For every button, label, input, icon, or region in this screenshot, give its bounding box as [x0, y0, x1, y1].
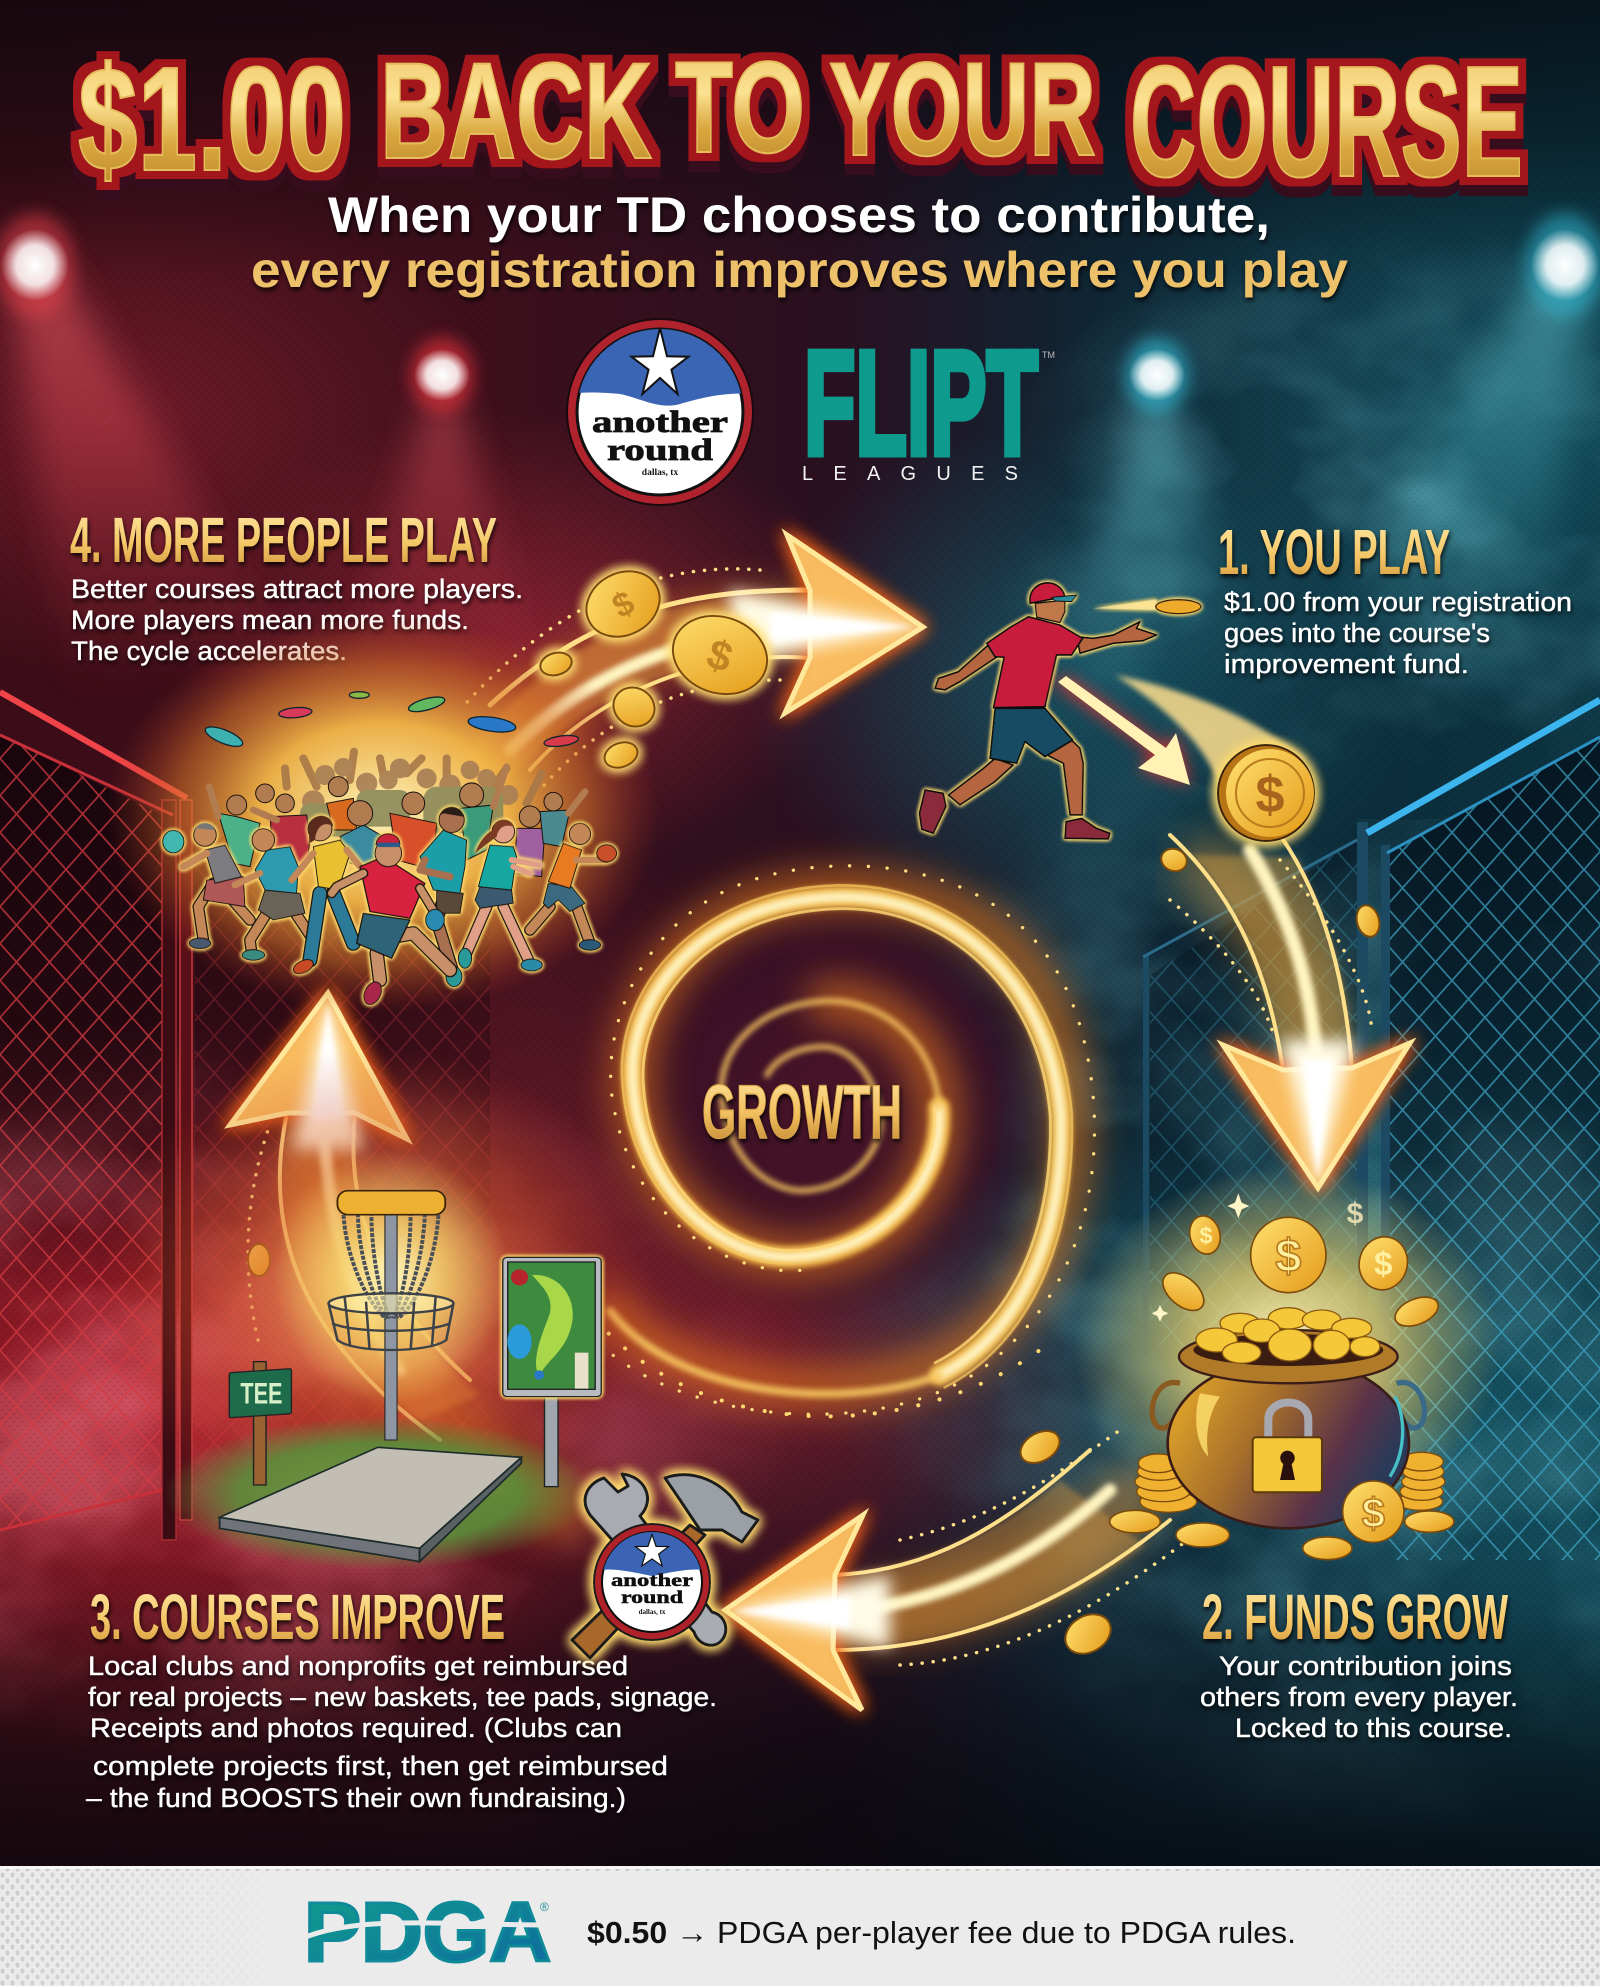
- back shoe: [919, 790, 946, 833]
- coin stacks: [1135, 1452, 1445, 1512]
- wrench: [585, 1474, 726, 1645]
- illustration: pot of gold: $: [1347, 1197, 1364, 1230]
- basket cage: [329, 1293, 453, 1350]
- step 1 text: [1218, 516, 1572, 679]
- logo: flipt leagues: FLIPT: [804, 321, 1038, 486]
- teal shirt runner: [235, 829, 313, 960]
- front arm: [1077, 622, 1157, 653]
- back leg: [948, 758, 1013, 805]
- padlock: [1253, 1402, 1322, 1492]
- logo: pdga: ®: [540, 1900, 549, 1914]
- orange course glow: [100, 1047, 657, 1527]
- growth label: GROWTH: [702, 1070, 902, 1155]
- ground coins: [1110, 1481, 1454, 1560]
- shirt: [987, 617, 1083, 708]
- title: TO: [675, 34, 805, 180]
- front shoe: [1065, 818, 1110, 839]
- step 2 text: Locked to this course.: [1235, 1713, 1512, 1743]
- grass: [164, 1417, 593, 1570]
- main red shirt runner: [332, 834, 450, 1008]
- back row: [285, 752, 542, 837]
- step 3 text: complete projects first, then get reimbursed: [93, 1751, 668, 1781]
- left fence: [0, 692, 490, 1540]
- pot rim and coins: [1179, 1330, 1398, 1383]
- hammer handle: [572, 1525, 705, 1658]
- icon: tools and logo badge: round: [621, 1587, 683, 1607]
- step 3 text: Local clubs and nonprofits get reimbursed: [88, 1651, 628, 1681]
- disc thrower grey: [163, 823, 250, 949]
- logo: another round: dallas, tx: [642, 468, 678, 478]
- illustration: cheering crowd: [107, 613, 660, 1013]
- logo: another round: another: [592, 404, 728, 439]
- step 2 text: Your contribution joins: [1219, 1651, 1512, 1681]
- arrow: you play to funds grow: [1170, 835, 1410, 1188]
- tee sign: [229, 1362, 291, 1485]
- pot body: [1168, 1358, 1409, 1528]
- logo: flipt leagues: LEAGUES: [802, 463, 1018, 485]
- logo: another round: round: [607, 432, 713, 467]
- icon: large coin: $: [1256, 766, 1285, 824]
- title: [78, 34, 1523, 210]
- floating coins: $: [1374, 1246, 1393, 1283]
- illustration: pot of gold: [1073, 1167, 1500, 1560]
- logo: another round: [567, 319, 753, 505]
- step 1 text: goes into the course's: [1224, 618, 1490, 648]
- middle row: [218, 777, 570, 877]
- step 1 text: $1.00 from your registration: [1224, 587, 1572, 617]
- head: [1035, 600, 1065, 623]
- front players: [163, 807, 617, 1008]
- icon: tools and logo badge: [572, 1474, 758, 1658]
- step 3 text: – the fund BOOSTS their own fundraising.): [86, 1783, 626, 1813]
- course map sign: [503, 1257, 601, 1487]
- step 1 text: improvement fund.: [1224, 649, 1469, 679]
- floating coins: $: [1275, 1230, 1301, 1282]
- icon: tools and logo badge: dallas, tx: [639, 1608, 666, 1616]
- shorts: [990, 708, 1073, 763]
- spotlights: [0, 213, 1600, 700]
- icon: tools and logo badge: another: [611, 1570, 693, 1590]
- step 3 text: for real projects – new baskets, tee pads, signage.: [88, 1682, 717, 1712]
- title: BACK: [380, 35, 652, 188]
- title: $1.00: [78, 37, 346, 202]
- logo: flipt leagues: TM: [1042, 350, 1055, 360]
- coins along the top arrow: $: [606, 584, 641, 626]
- handles: [1152, 1382, 1425, 1428]
- coins along the top arrow: [538, 559, 777, 772]
- step 3 text: Receipts and photos required. (Clubs can: [90, 1713, 622, 1743]
- teal polo man: [420, 807, 467, 987]
- subtitle: When your TD chooses to contribute,: [328, 187, 1270, 243]
- footer note: $0.50 → PDGA per-player fee due to PDGA rules.: [587, 1915, 1296, 1950]
- basket lid: [337, 1191, 445, 1215]
- back arm: [935, 643, 1000, 690]
- logo: flipt leagues: [802, 321, 1055, 486]
- disc: [1156, 600, 1201, 614]
- concrete tee pad: [220, 1447, 521, 1562]
- yellow shirt woman: [291, 816, 360, 977]
- step 4 text: Better courses attract more players.: [71, 574, 523, 604]
- step 4 text: More players mean more funds.: [71, 605, 469, 635]
- coins along the top arrow: $: [701, 630, 738, 681]
- basket pole: [385, 1210, 397, 1440]
- subtitle: [251, 187, 1348, 298]
- subtitle: every registration improves where you play: [251, 242, 1348, 298]
- illustration: basket, tee pad and course sign: [100, 1047, 657, 1570]
- teal shirt woman: [458, 820, 542, 971]
- hammer head: [665, 1475, 758, 1542]
- front leg: [1028, 740, 1083, 815]
- orange shirt runner: [530, 823, 617, 950]
- right fence: [1143, 700, 1600, 1560]
- step 4 text: [70, 504, 523, 666]
- icon: large coin: [1218, 745, 1314, 841]
- logo: pdga: PDGA: [304, 1885, 551, 1979]
- chains: [344, 1212, 438, 1318]
- basket glow: [273, 1150, 509, 1403]
- tee sign: TEE: [240, 1377, 282, 1410]
- step 4 text: The cycle accelerates.: [71, 636, 347, 666]
- visor: [1052, 595, 1077, 602]
- step 4 text: 4. MORE PEOPLE PLAY: [70, 504, 497, 576]
- step 2 text: others from every player.: [1200, 1682, 1518, 1712]
- step 3 text: [86, 1581, 717, 1813]
- ground coins: $: [1362, 1489, 1385, 1536]
- arrow: courses improve to more people play: [230, 993, 560, 1510]
- title: YOUR: [829, 36, 1096, 184]
- footer band: [0, 1866, 1600, 1986]
- illustration: disc golfer: [919, 583, 1201, 839]
- floating coins: $: [1199, 1222, 1212, 1248]
- step 2 text: [1200, 1581, 1518, 1743]
- arrow: more people play to you play: [450, 535, 923, 800]
- disc trail: [1093, 599, 1157, 610]
- central growth spiral: [580, 866, 1095, 1416]
- small arrow and coin from player: [1050, 675, 1314, 841]
- loose coins on the other arrows: [248, 845, 1383, 1662]
- step 1 text: 1. YOU PLAY: [1218, 516, 1450, 588]
- step 3 text: 3. COURSES IMPROVE: [90, 1581, 505, 1653]
- floating coins: [1156, 1212, 1442, 1332]
- cap: [1030, 583, 1065, 603]
- arrow: funds grow to courses improve: [725, 1430, 1200, 1710]
- flying discs: [203, 692, 579, 750]
